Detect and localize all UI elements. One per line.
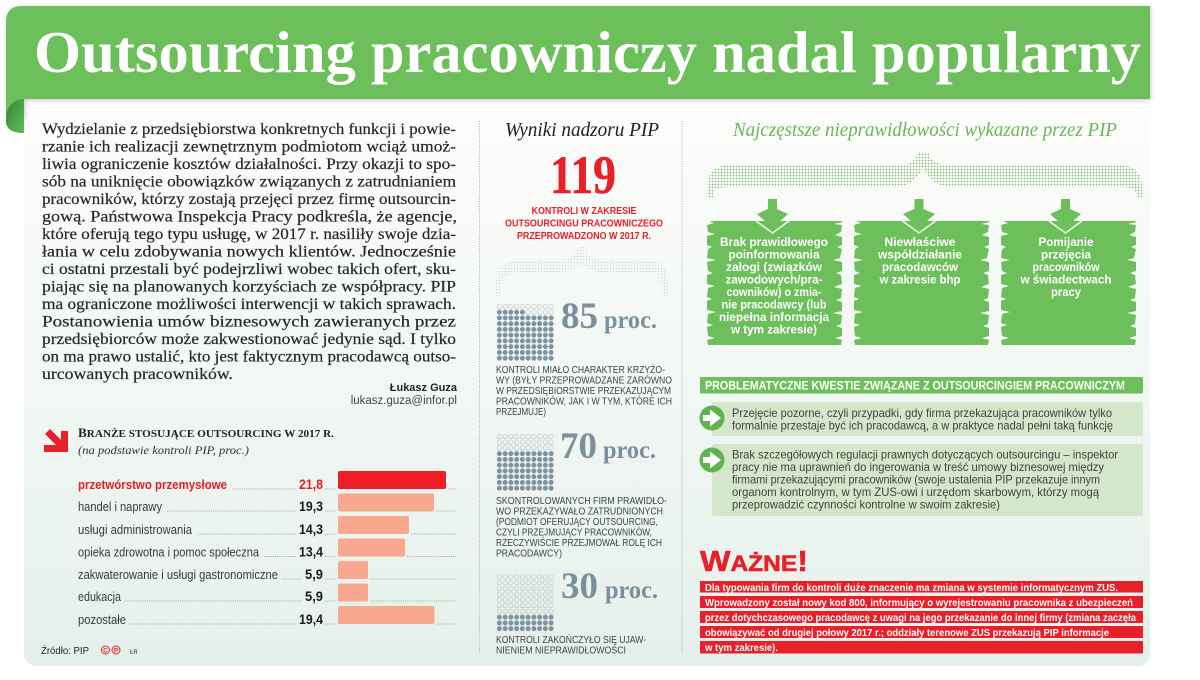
stat: 70 proc.: PRACODAWCY) — [496, 548, 562, 560]
stat: 30 proc.: 30 — [561, 566, 598, 607]
bar chart: 14,3 — [299, 522, 323, 537]
green dotted brace — [707, 152, 1142, 198]
heading: Najczęstsze nieprawidłowości: Najczęstsze nieprawidłowości wykazane przez PIP — [732, 119, 1117, 141]
stat: 70 proc.: SKONTROLOWANYCH FIRM PRAWIDŁO- — [496, 496, 667, 507]
caption 119: PRZEPROWADZONO W 2017 R. — [517, 231, 651, 242]
stat: 85 proc.: 85 — [561, 296, 598, 337]
issue 1 — [700, 402, 1143, 436]
bar chart: przetwórstwo przemysłowe — [78, 478, 227, 492]
stat: 70 proc.: (PODMIOT OFERUJĄCY OUTSOURCING, — [496, 517, 658, 528]
stat: 85 proc.: W PRZEDSIĘBIORSTWIE PRZEKAZUJĄCYM — [496, 386, 671, 397]
bar chart: zakwaterowanie i usługi gastronomiczne — [78, 568, 278, 582]
stat: 70 proc.: RZECZYWIŚCIE PRZEJMOWAŁ ROLĘ ICH — [496, 536, 662, 549]
issue 2: organom kontrolnym, w tym ZUS-owi i urzędom skarbowym, którzy mogą — [732, 485, 1099, 499]
box 2: bhp: w zakresie bhp — [879, 274, 960, 286]
bar chart: 19,3 — [299, 499, 323, 514]
stat: 70 proc.: WO PRZEKAZYWAŁO ZATRUDNIONYCH — [496, 506, 663, 518]
column dividers — [480, 121, 682, 653]
bar chart: 19,4 — [299, 612, 323, 627]
source: C — [103, 648, 108, 654]
bar chart: 5,9 — [305, 567, 323, 582]
box 2: bhp: Niewłaściwe — [884, 236, 956, 249]
bar chart: pozostałe — [78, 613, 126, 627]
intro text: urcowanych pracowników. — [42, 366, 233, 383]
caption 119: OUTSOURCINGU PRACOWNICZEGO — [505, 218, 663, 230]
stat: 70 proc. — [496, 426, 667, 560]
intro text: sób na uniknięcie obowiązków związanych z zatrudnianiem — [42, 174, 456, 190]
intro text: piając się na planowanych korzyściach ze współpracy. PIP — [42, 278, 456, 296]
icon: red arrow — [44, 429, 68, 452]
stat: 30 proc.: KONTROLI ZAKOŃCZYŁO SIĘ UJAW- — [496, 633, 646, 646]
important note: obowiązywać od drugiej połowy 2017 r.; oddziały terenowe ZUS przekazują PIP informacje — [705, 628, 1109, 639]
source — [41, 644, 138, 657]
intro text: ci ostatni przestali być podejrzliwi wobec takich ofert, sku- — [42, 261, 456, 278]
source: ŁR — [130, 650, 138, 656]
bar chart: opieka zdrowotna i pomoc społeczna — [78, 546, 259, 560]
section heading bar: PROBLEMATYCZNE KWESTIE ZWIĄZANE Z OUTSOURCINGIEM PRACOWNICZYM — [705, 380, 1125, 392]
chart heading: (na podstawie kontroli PIP, proc.) — [78, 443, 249, 457]
intro text: łania w celu zdobywania nowych klientów. Jednocześnie — [42, 244, 456, 260]
intro text: Wydzielanie z przedsiębiorstwa konkretnych funkcji i powie- — [42, 121, 456, 138]
intro text: ma ograniczone możliwości interwencji w takich sprawach. — [42, 296, 456, 313]
box 1: poinformowanie — [707, 199, 843, 345]
box 2: bhp — [854, 199, 990, 345]
content panel — [24, 99, 1150, 666]
box 3: świadectwa pracy — [1001, 199, 1137, 345]
intro text: liwia ograniczenie kosztów działalności. Przy okazji to spo- — [42, 156, 456, 173]
heading: Ważne: WAŻNE! — [700, 546, 808, 578]
box 3: świadectwa pracy: przejęcia — [1041, 248, 1092, 262]
important note: w tym zakresie). — [704, 643, 778, 654]
big number 119: 119 — [550, 145, 616, 205]
important note — [700, 581, 1143, 654]
caption 119 — [505, 206, 663, 242]
heading: Wyniki nadzoru PIP: Wyniki nadzoru PIP — [505, 119, 659, 141]
box 1: poinformowanie: załogi (związków — [726, 261, 823, 274]
box 1: poinformowanie: w tym zakresie) — [730, 324, 817, 336]
issue 2: przeprowadzić czynności kontrolne w swoim zakresie) — [732, 498, 1000, 512]
author — [351, 382, 458, 407]
stat: 85 proc.: proc. — [604, 307, 657, 334]
stat: 85 proc.: PRACOWNIKÓW, JAK I W TYM, KTÓRE ICH — [496, 394, 672, 408]
stat: 70 proc.: 70 — [560, 426, 597, 467]
issue 2: firmami przekazującymi pracowników (swoje ustalenia PIP przekazuje innym — [732, 472, 1100, 486]
title banner: Outsourcing pracowniczy nadal popularny — [34, 19, 1141, 85]
stat: 30 proc.: NIENIEM NIEPRAWIDŁOWOŚCI — [496, 644, 626, 656]
box 1: poinformowanie: Brak prawidłowego — [720, 236, 828, 249]
box 1: poinformowanie: zawodowych/pra- — [726, 274, 823, 286]
box 2: bhp: współdziałanie — [877, 248, 963, 262]
bar chart — [78, 471, 456, 627]
intro text: przedsiębiorców może zakwestionować jedynie sąd. I tylko — [42, 331, 456, 348]
grey dotted brace — [496, 247, 668, 296]
source: Źródło: PIP — [41, 644, 89, 657]
stat: 85 proc.: WY (BYŁY PRZEPROWADZANE ZARÓWNO — [496, 374, 672, 386]
box 1: poinformowanie: nie pracodawcy (lub — [722, 298, 826, 312]
intro text: rzanie ich realizacji zewnętrznym podmiotom wciąż umoż- — [42, 138, 456, 156]
bar chart: usługi administrowania — [78, 523, 192, 537]
intro text — [42, 121, 457, 383]
intro text: on ma prawo ustalić, kto jest faktycznym pracodawcą outso- — [42, 348, 456, 366]
bar chart: handel i naprawy — [78, 500, 163, 514]
important note: Wprowadzony został nowy kod 800, informujący o wyrejestrowaniu pracownika z ubezpieczeń — [705, 598, 1133, 609]
issue 2: pracy nie ma uprawnień do ingerowania w treść umowy biznesowej między — [732, 460, 1104, 474]
issue 1: formalnie przestaje być ich pracodawcą, a w praktyce nadal pełni taką funkcję — [732, 418, 1113, 432]
stat: 85 proc.: PRZEJMUJE) — [496, 407, 546, 418]
stat: 70 proc.: CZYLI PRZEJMUJĄCY PRACOWNIKÓW, — [496, 526, 652, 538]
box 1: poinformowanie: poinformowania — [728, 248, 820, 262]
issue 2: Brak szczegółowych regulacji prawnych dotyczących outsourcingu – inspektor — [732, 448, 1118, 462]
stat: 30 proc. — [496, 566, 658, 656]
bar chart: 21,8 — [299, 477, 323, 492]
stat: 70 proc.: proc. — [603, 437, 656, 464]
box 2: bhp: pracodawców — [882, 261, 959, 274]
author: lukasz.guza@infor.pl — [351, 395, 457, 407]
stat: 30 proc.: proc. — [605, 577, 658, 604]
important note: Dla typowania firm do kontroli duże znaczenie ma zmiana w systemie informatycznym ZUS. — [705, 583, 1118, 594]
important note: przez dotychczasowego pracodawcę z uwagi na jego przekazanie do innej firmy (zmiana zaczęła — [705, 613, 1136, 624]
issue 2 — [700, 444, 1143, 516]
chart heading: BRANŻE STOSUJĄCE OUTSOURCING W 2017 R. — [78, 425, 334, 440]
box 3: świadectwa pracy: Pomijanie — [1038, 236, 1094, 249]
box 1: poinformowanie: cowników) o zmia- — [726, 286, 822, 299]
source: P — [114, 648, 119, 654]
box 3: świadectwa pracy: pracy — [1051, 286, 1082, 299]
title banner — [6, 6, 1150, 133]
intro text: gową. Państwowa Inspekcja Pracy podkreśla, że agencje, — [42, 208, 457, 226]
stat: 85 proc.: KONTROLI MIAŁO CHARAKTER KRZYŻO- — [496, 363, 665, 376]
bar chart: edukacja — [78, 590, 121, 604]
intro text: Postanowienia umów biznesowych zawieranych przez — [42, 314, 456, 330]
chart heading — [78, 425, 334, 457]
caption 119: KONTROLI W ZAKRESIE — [532, 206, 637, 217]
issue 1: Przejęcie pozorne, czyli przypadki, gdy firma przekazująca pracowników tylko — [732, 406, 1112, 420]
bar chart: 13,4 — [299, 544, 323, 560]
box 1: poinformowanie: niepełna informacja — [719, 311, 830, 324]
box 3: świadectwa pracy: pracowników — [1032, 261, 1100, 274]
author: Łukasz Guza — [390, 382, 458, 394]
intro text: pracowników, którzy zostają przejęci przez firmę outsourcin- — [42, 191, 456, 208]
stat: 85 proc. — [496, 296, 672, 418]
intro text: które oferują tego typu usługę, w 2017 r. nasiliły swoje dzia- — [42, 226, 456, 243]
bar chart: 5,9 — [305, 589, 323, 604]
box 3: świadectwa pracy: w świadectwach — [1019, 274, 1112, 286]
